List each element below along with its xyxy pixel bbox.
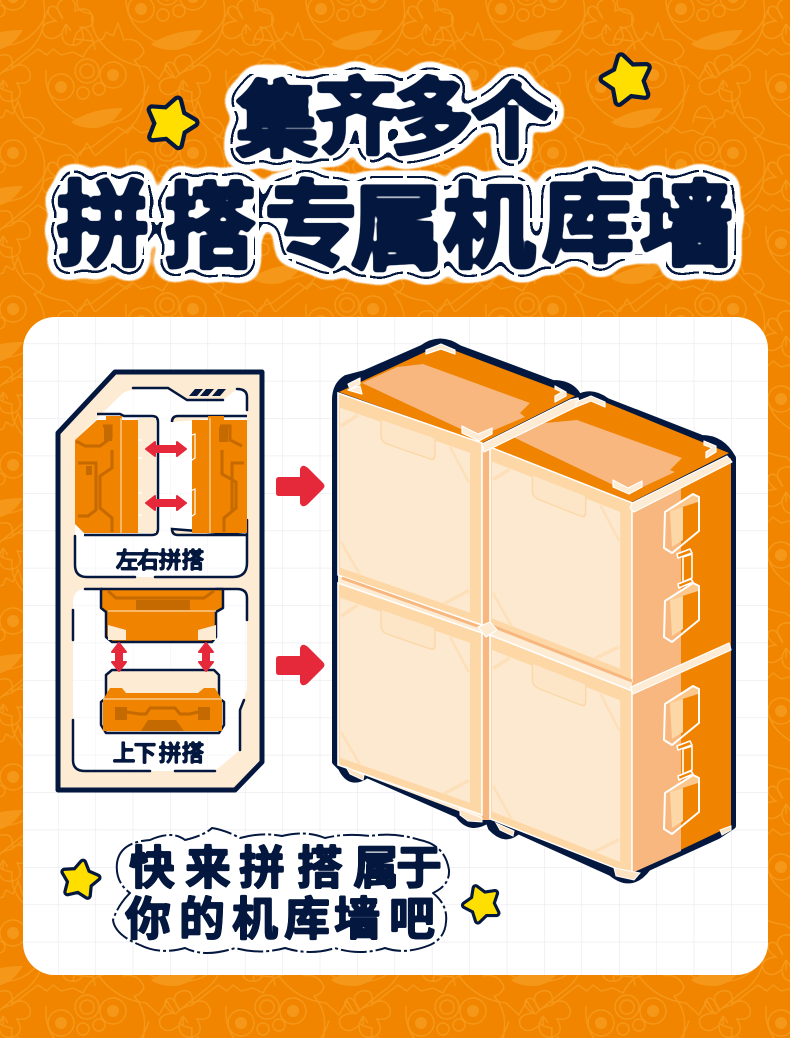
arrow: left-right bottom — [146, 496, 186, 510]
title: two-line bubble heading — [56, 71, 733, 282]
panel: white grid card — [23, 317, 768, 975]
guide window: up-down — [73, 589, 247, 771]
title line 2: 拼搭专属机库墙 — [56, 169, 733, 282]
front base — [338, 393, 632, 873]
panel: assembly guide — [58, 372, 262, 790]
side faces — [482, 443, 731, 873]
icon: battery marks — [189, 389, 226, 396]
arrow: left-right top — [146, 442, 186, 456]
label: left-right: 左右拼搭 — [116, 547, 204, 573]
front panels — [338, 393, 632, 875]
star: callout right — [461, 882, 502, 923]
guide window: left-right — [75, 388, 247, 577]
corner brackets and seams — [348, 344, 732, 694]
arrow: to top row — [276, 466, 324, 506]
crate: right half — [172, 416, 247, 535]
cloud outline — [113, 828, 449, 953]
star: title right — [600, 52, 653, 104]
guide frame — [58, 372, 262, 790]
clasps — [664, 494, 699, 834]
label: up-down: 上下拼搭 — [112, 740, 204, 766]
arrow: to bottom row — [276, 645, 324, 685]
crate: left half — [75, 414, 158, 535]
illustration: hangar wall of four crates — [335, 342, 733, 880]
crate: bottom half — [101, 670, 224, 733]
crate: top half — [101, 589, 223, 642]
title line 1: 集齐多个 — [235, 71, 554, 169]
arrow: up-down right — [199, 643, 213, 671]
star: callout left — [61, 860, 99, 897]
callout: dashed speech cloud — [113, 828, 449, 953]
feet — [346, 767, 731, 880]
star: title left — [145, 95, 199, 147]
top faces — [339, 345, 729, 502]
arrow: up-down left — [112, 643, 126, 671]
silhouette — [335, 342, 733, 880]
callout line 1: 快来拼搭属于 — [129, 842, 442, 894]
callout line 2: 你的机库墙吧 — [125, 893, 435, 945]
